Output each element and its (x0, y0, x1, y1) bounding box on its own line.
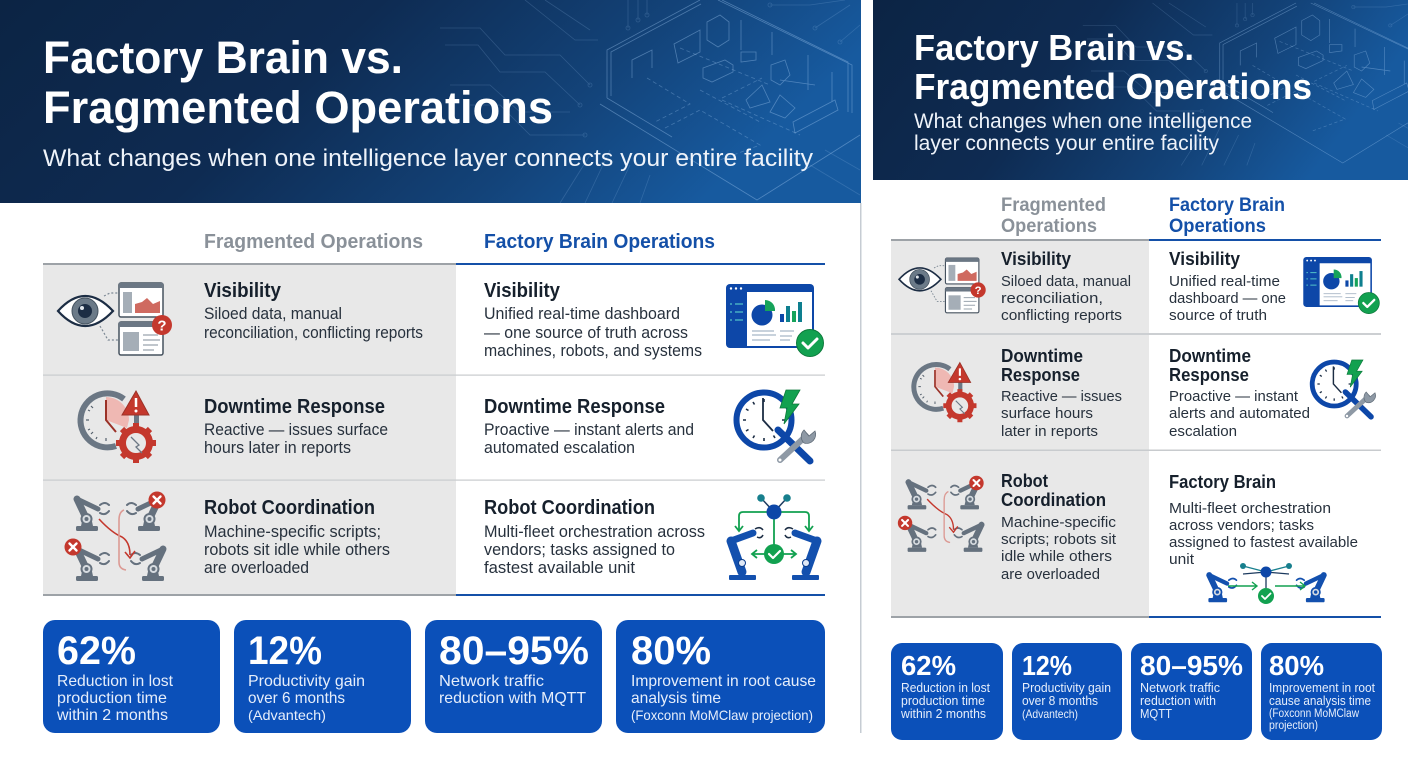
narrow row: robots, fragmented (898, 471, 1117, 583)
text: robots factory brain: Multi-fleet orchestration (1169, 500, 1331, 517)
stat card: 12% (1012, 643, 1122, 740)
text: downtime fragmented (204, 396, 388, 457)
text: visibility fragmented (1001, 249, 1131, 324)
text: robots factory brain: Multi-fleet orchestration across (484, 523, 705, 541)
narrow column headers: Factory Brain (1169, 195, 1285, 216)
text: visibility fragmented: Siloed data, manual (1001, 273, 1131, 290)
text: robots fragmented: are overloaded (1001, 566, 1100, 583)
text: visibility fragmented: Visibility (1001, 249, 1071, 269)
stat card: 12%: Productivity gain (248, 673, 365, 690)
wide row: downtime, factory brain (484, 390, 816, 462)
text: robots fragmented: Machine-specific (1001, 514, 1117, 531)
text: robots fragmented: idle while others (1001, 548, 1112, 565)
text: downtime fragmented: Downtime (1001, 346, 1083, 366)
stat card: 12%: over 8 months (1022, 693, 1098, 708)
text: downtime factory brain (484, 396, 694, 457)
text: downtime fragmented (1001, 346, 1122, 440)
stat card: 80% (1261, 643, 1382, 740)
text: robots factory brain: vendors; tasks assigned to (484, 541, 675, 559)
text: downtime factory brain: escalation (1169, 423, 1237, 440)
text: robots fragmented: scripts; robots sit (1001, 531, 1117, 548)
text: downtime factory brain: Response (1169, 365, 1249, 385)
narrow stat cards (891, 643, 1382, 740)
text: robots factory brain: assigned to fastest available (1169, 534, 1358, 551)
text: downtime fragmented: Reactive — issues surface (204, 421, 388, 439)
stat card: 80%: 80% (1269, 650, 1324, 681)
narrow subtitle (914, 110, 1252, 155)
stat card: 80%: (Foxconn MoMClaw (1269, 708, 1360, 720)
text: robots fragmented: Coordination (1001, 490, 1106, 510)
text: robots factory brain: Robot Coordination (484, 497, 655, 519)
text: visibility factory brain: Visibility (484, 280, 561, 302)
text: robots factory brain: unit (1169, 551, 1195, 568)
text: visibility fragmented: Visibility (204, 280, 282, 302)
text: visibility fragmented (204, 280, 423, 342)
icon: clock, warning and gear (81, 391, 156, 463)
wide header banner (0, 0, 861, 203)
text: downtime fragmented: hours later in reports (204, 439, 351, 457)
stat card: 62%: within 2 months (900, 706, 986, 721)
wide row: visibility, factory brain (484, 280, 824, 360)
wide title (43, 32, 553, 133)
text: robots fragmented: Machine-specific scripts; (204, 523, 381, 541)
narrow row: visibility, factory brain (1169, 249, 1379, 324)
text: robots fragmented: are overloaded (204, 559, 309, 577)
stat card: 80-95% (1131, 643, 1252, 740)
icon: dashboard with check (726, 284, 824, 356)
text: visibility factory brain: Unified real-time dashboard (484, 305, 680, 323)
narrow subtitle: layer connects your entire facility (914, 132, 1219, 155)
stat card: 80%: Improvement in root (1269, 680, 1375, 695)
stat card: 12%: (Advantech) (1022, 707, 1078, 721)
text: downtime factory brain (1169, 346, 1310, 440)
wide column headers: Fragmented Operations (204, 231, 423, 253)
text: visibility fragmented: reconciliation, (1001, 290, 1103, 307)
stat card: 62%: within 2 months (56, 707, 168, 724)
text: robots fragmented: Robot Coordination (204, 497, 375, 519)
stat card: 80-95%: MQTT (1140, 706, 1172, 721)
stat card: 80%: Improvement in root cause (631, 673, 816, 690)
text: downtime fragmented: later in reports (1001, 423, 1098, 440)
stat card: 80-95%: Network traffic (439, 673, 544, 690)
stat card: 80-95%: reduction with MQTT (439, 690, 586, 707)
icon: dashboard with check (1303, 257, 1379, 314)
stat card: 12%: 12% (1022, 650, 1072, 681)
text: visibility factory brain (1169, 249, 1286, 324)
wide title: Factory Brain vs. (43, 32, 403, 83)
wide divider (860, 203, 862, 733)
text: robots factory brain: across vendors; tasks (1169, 517, 1314, 534)
stat card: 62%: 62% (57, 629, 136, 673)
text: visibility factory brain: dashboard — one (1169, 290, 1286, 307)
stat card: 80-95%: 80–95% (1140, 650, 1243, 681)
text: visibility fragmented: reconciliation, conflicting reports (204, 324, 423, 342)
stat card: 62% (891, 643, 1003, 740)
text: downtime fragmented: Response (1001, 365, 1080, 385)
icon: clock, warning and gear (914, 363, 976, 422)
icon: clock, bolt and wrench (736, 390, 816, 462)
wide row: downtime, fragmented (81, 391, 388, 463)
panel: wide layout (0, 0, 862, 733)
narrow column headers: Operations (1001, 216, 1097, 237)
stat card: 80%: projection) (1269, 720, 1318, 732)
narrow comparison table (891, 195, 1381, 618)
stat card: 12%: (Advantech) (248, 707, 326, 723)
text: visibility factory brain: source of truth (1169, 307, 1267, 324)
narrow column headers: Fragmented (1001, 195, 1106, 216)
stat card: 62%: production time (57, 690, 167, 707)
icon: orchestrated robots (729, 494, 819, 580)
stat card: 62%: Reduction in lost (901, 680, 990, 695)
text: downtime factory brain: automated escalation (484, 439, 635, 457)
stat card: 80%: analysis time (631, 690, 721, 707)
wide column headers: Factory Brain Operations (484, 231, 715, 253)
text: downtime factory brain: Downtime Response (484, 396, 665, 418)
icon: eye and conflicting reports (58, 283, 172, 355)
stat card: 62%: 62% (901, 650, 956, 681)
panel: narrow layout (873, 0, 1408, 740)
wide subtitle: What changes when one intelligence layer connects your entire facility (43, 145, 813, 172)
stat card: 12%: Productivity gain (1022, 680, 1111, 695)
text: downtime factory brain: Downtime (1169, 346, 1251, 366)
text: downtime fragmented: Downtime Response (204, 396, 385, 418)
text: robots fragmented (204, 497, 390, 577)
text: robots fragmented: robots sit idle while others (204, 541, 390, 559)
wide row: visibility, fragmented (58, 280, 423, 355)
wide stat cards (43, 620, 825, 733)
wide comparison table (43, 231, 825, 596)
text: robots factory brain: Factory Brain (1169, 472, 1276, 492)
narrow title: Factory Brain vs. (914, 27, 1194, 68)
stat card: 12%: over 6 months (248, 690, 345, 707)
narrow column headers: Operations (1169, 216, 1266, 237)
narrow column headers (1001, 195, 1285, 237)
stat card: 62% (43, 620, 220, 733)
narrow title: Fragmented Operations (914, 66, 1312, 107)
stat card: 62%: production time (901, 693, 985, 708)
icon: uncoordinated robots (898, 476, 984, 552)
icon: uncoordinated robots (64, 492, 166, 581)
text: visibility factory brain: machines, robots, and systems (484, 342, 702, 360)
text: robots factory brain (484, 497, 705, 577)
narrow row: visibility, fragmented (899, 249, 1131, 324)
text: downtime fragmented: surface hours (1001, 405, 1093, 422)
stat card: 80%: cause analysis time (1269, 693, 1371, 708)
text: downtime factory brain: alerts and automated (1169, 405, 1310, 422)
text: downtime fragmented: Reactive — issues (1001, 388, 1122, 405)
stat card: 12%: 12% (248, 629, 322, 673)
icon: orchestrated robots, compact (1208, 563, 1325, 604)
stat card: 80-95% (425, 620, 602, 733)
wide row: robots, fragmented (64, 492, 390, 581)
narrow subtitle: What changes when one intelligence (914, 110, 1252, 133)
stat card: 80%: 80% (631, 629, 711, 673)
text: visibility factory brain: Visibility (1169, 249, 1240, 269)
narrow row: downtime, fragmented (914, 346, 1122, 440)
text: visibility fragmented: Siloed data, manual (204, 305, 342, 323)
stat card: 12% (234, 620, 411, 733)
narrow row: downtime, factory brain (1169, 346, 1376, 440)
text: visibility factory brain: Unified real-time (1169, 273, 1280, 290)
stat card: 80-95%: 80–95% (439, 629, 589, 673)
stat card: 80-95%: reduction with (1140, 693, 1216, 708)
text: robots factory brain: fastest available unit (484, 559, 635, 577)
text: visibility fragmented: conflicting reports (1001, 307, 1122, 324)
text: visibility factory brain: — one source of truth across (484, 324, 688, 342)
stat card: 80%: (Foxconn MoMClaw projection) (631, 707, 813, 723)
stat card: 80% (616, 620, 825, 733)
icon: eye and conflicting reports (899, 258, 986, 313)
narrow title (914, 27, 1312, 107)
text: robots factory brain (1169, 472, 1358, 568)
text: robots fragmented (1001, 471, 1117, 583)
text: visibility factory brain (484, 280, 702, 360)
narrow row: robots, factory brain (1169, 472, 1358, 604)
stat card: 62%: Reduction in lost (57, 673, 174, 690)
narrow header banner (873, 0, 1408, 180)
icon: clock, bolt and wrench (1312, 360, 1376, 417)
stat card: 80-95%: Network traffic (1140, 680, 1220, 695)
wide column headers (204, 231, 715, 253)
text: robots fragmented: Robot (1001, 471, 1048, 491)
wide row: robots, factory brain (484, 494, 819, 580)
text: downtime factory brain: Proactive — instant alerts and (484, 421, 694, 439)
wide title: Fragmented Operations (43, 82, 553, 133)
text: downtime factory brain: Proactive — instant (1169, 388, 1299, 405)
